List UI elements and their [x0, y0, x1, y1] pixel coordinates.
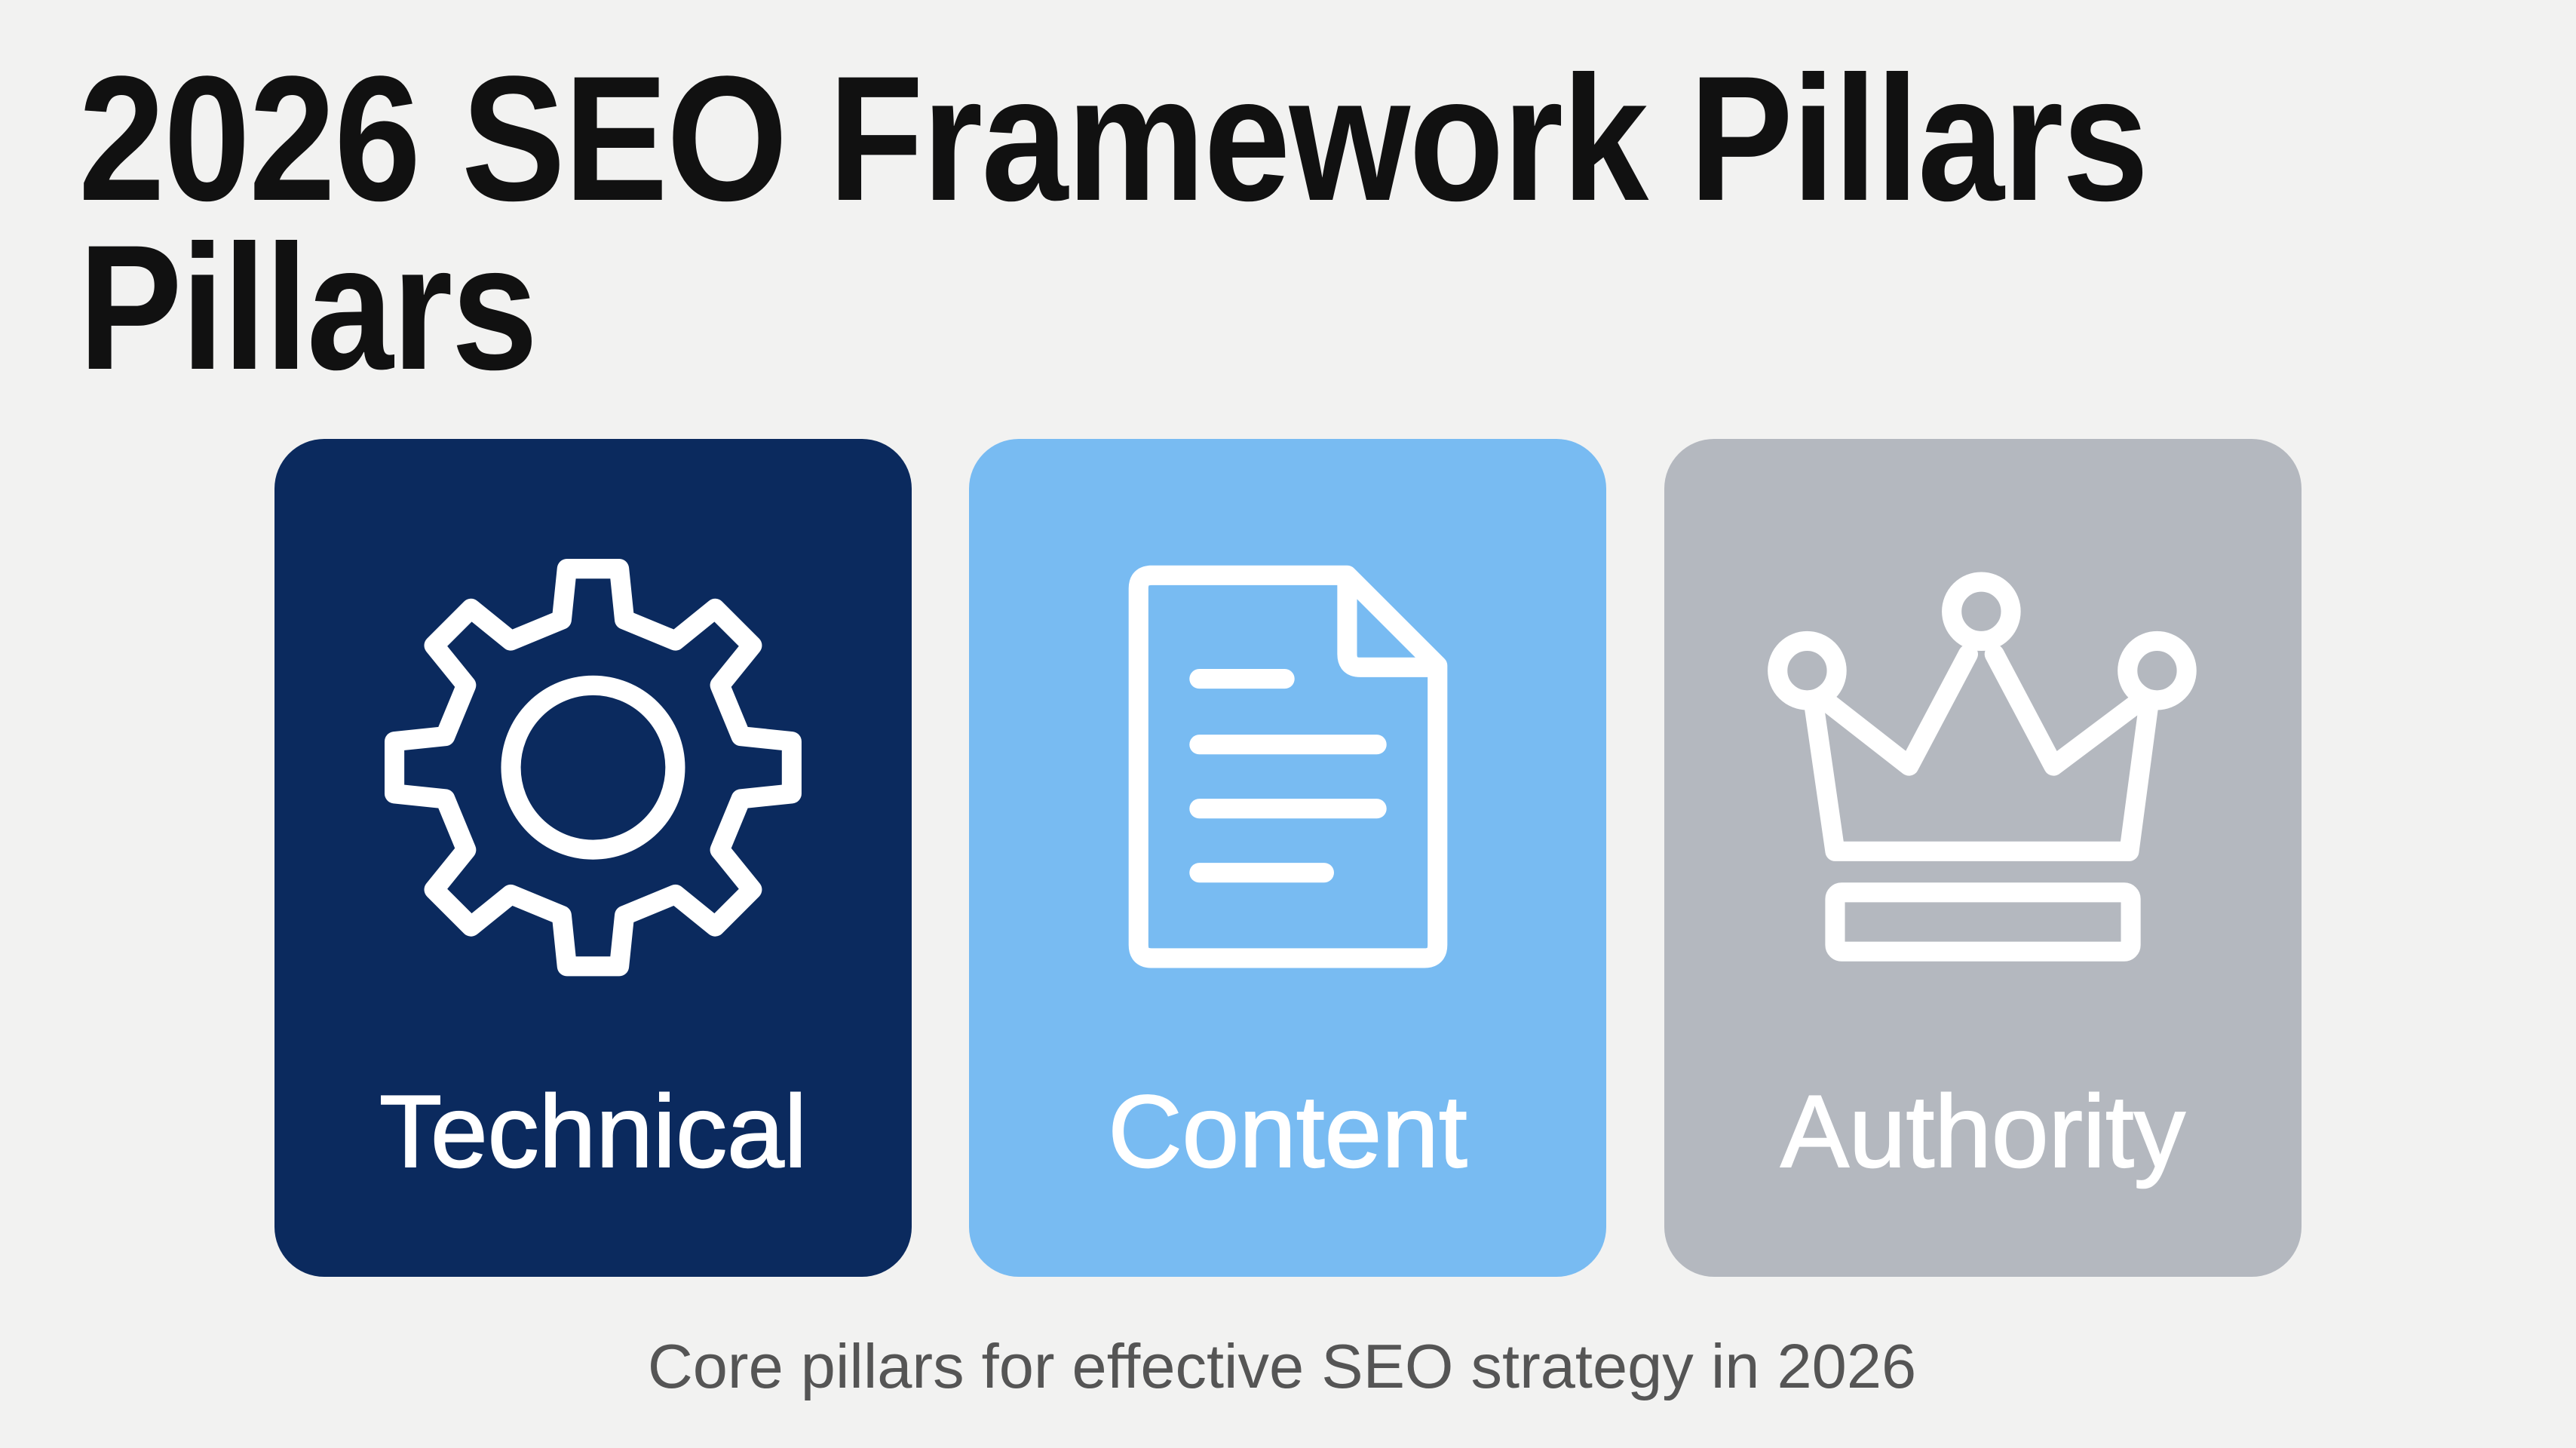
label: content: Content	[1108, 1074, 1467, 1189]
subtitle: Core pillars for effective SEO strategy in 2026	[648, 1331, 1916, 1401]
title: 2026 SEO Framework Pillars	[78, 39, 2148, 238]
label: technical: Technical	[379, 1074, 807, 1189]
panel: content	[969, 439, 1606, 1277]
icon: gear	[394, 569, 792, 966]
label: authority: Authority	[1780, 1074, 2185, 1189]
icon: document	[1139, 575, 1437, 958]
panel: authority	[1664, 439, 2302, 1277]
panel: technical	[274, 439, 912, 1277]
title: Pillars	[78, 208, 537, 407]
icon: crown	[1777, 582, 2187, 952]
title	[78, 39, 2148, 407]
